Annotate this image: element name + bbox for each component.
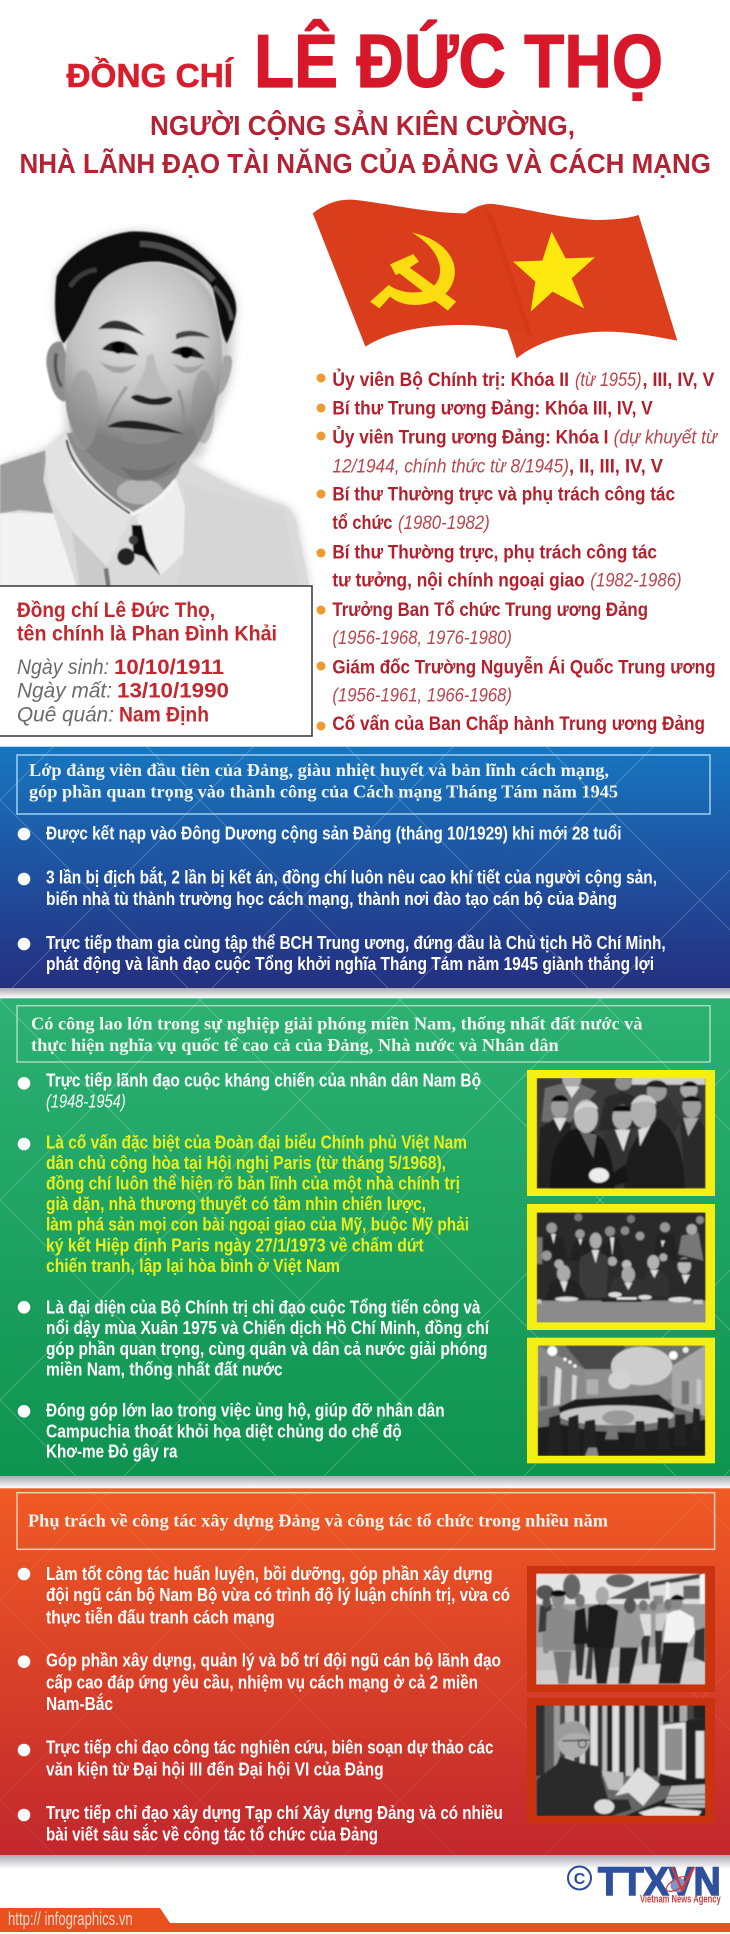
green item 3: miền Nam, thống nhất đất nước xyxy=(46,1360,283,1380)
logo: TTXVN: TTXVN xyxy=(598,1860,721,1904)
green item 2 highlighted: già dặn, nhà thương thuyết có tầm nhìn chiến lược, xyxy=(46,1194,426,1214)
photo: handshake xyxy=(527,1070,715,1196)
orange panel heading xyxy=(17,1493,715,1549)
position 6 xyxy=(316,599,648,649)
hometown: Nam Định xyxy=(119,704,209,727)
green item 3: Là đại diện của Bộ Chính trị chỉ đạo cuộc Tổng tiến công và xyxy=(46,1297,481,1317)
orange panel heading: Phụ trách về công tác xây dựng Đảng và công tác tổ chức trong nhiều năm xyxy=(28,1511,608,1531)
green item 1: (1948-1954) xyxy=(46,1091,126,1111)
green item 1 xyxy=(18,1071,481,1111)
info box xyxy=(0,586,312,736)
position 2: Bí thư Trung ương Đảng: Khóa III, IV, V xyxy=(332,398,653,420)
birth date: Ngày sinh: xyxy=(17,656,109,679)
photo: walking group xyxy=(527,1566,715,1692)
position 5: Bí thư Thường trực, phụ trách công tác xyxy=(332,541,657,563)
position 7 xyxy=(316,654,716,706)
green item 2 highlighted: dân chủ cộng hòa tại Hội nghị Paris (từ tháng 5/1968), xyxy=(46,1153,446,1173)
orange item 4: bài viết sâu sắc về công tác tổ chức của Đảng xyxy=(46,1824,378,1845)
name: Đồng chí Lê Đức Thọ, xyxy=(17,599,215,622)
name xyxy=(17,599,277,646)
position 3: (dự khuyết từ xyxy=(614,426,718,448)
name: tên chính là Phan Đình Khải xyxy=(17,623,277,646)
position 7: (1956-1961, 1966-1968) xyxy=(332,684,512,706)
position 1 xyxy=(316,367,714,391)
green panel heading xyxy=(17,1006,710,1062)
green item 3: góp phần quan trọng, cùng quân và dân cả nước giải phóng xyxy=(46,1339,487,1359)
green panel heading: Có công lao lớn trong sự nghiệp giải phóng miền Nam, thống nhất đất nước và xyxy=(31,1013,642,1033)
logo: TTXVN: C xyxy=(574,1871,586,1888)
panel: blue xyxy=(0,747,730,998)
photo: man reading xyxy=(527,1698,715,1823)
portrait photo xyxy=(0,231,309,587)
blue item 2 xyxy=(18,866,657,909)
subtitle xyxy=(20,109,711,179)
green item 4: Khơ-me Đỏ gây ra xyxy=(46,1442,178,1462)
green item 3: nổi dậy mùa Xuân 1975 và Chiến dịch Hồ Chí Minh, đồng chí xyxy=(46,1318,490,1338)
footer bar with url xyxy=(0,1908,730,1932)
orange item 1: đội ngũ cán bộ Nam Bộ vừa có trình độ lý luận chính trị, vừa có xyxy=(46,1585,510,1605)
orange item 1: Làm tốt công tác huấn luyện, bồi dưỡng, góp phần xây dựng xyxy=(46,1564,492,1584)
photo: conference hall xyxy=(527,1338,715,1463)
blue panel heading: Lớp đảng viên đầu tiên của Đảng, giàu nhiệt huyết và bản lĩnh cách mạng, xyxy=(29,760,609,780)
green item 2 highlighted xyxy=(18,1132,469,1276)
orange item 2: Nam-Bắc xyxy=(46,1693,113,1714)
death date: Ngày mất: xyxy=(17,679,112,702)
death date xyxy=(17,679,229,702)
photo: signing table xyxy=(527,1204,715,1330)
position 3: , II, III, IV, V xyxy=(569,455,663,477)
positions list xyxy=(316,367,718,735)
subtitle: NGƯỜI CỘNG SẢN KIÊN CƯỜNG, xyxy=(150,109,575,141)
green panel heading: thực hiện nghĩa vụ quốc tế cao cả của Đảng, Nhà nước và Nhân dân xyxy=(31,1035,559,1055)
blue panel heading: góp phần quan trọng vào thành công của Cách mạng Tháng Tám năm 1945 xyxy=(29,782,618,802)
green item 4: Campuchia thoát khỏi họa diệt chủng do chế độ xyxy=(46,1421,402,1441)
death date: 13/10/1990 xyxy=(117,679,229,702)
footer bar with url: http:// infographics.vn xyxy=(8,1909,133,1929)
position 1: Ủy viên Bộ Chính trị: Khóa II xyxy=(332,367,569,391)
position 6: Trưởng Ban Tổ chức Trung ương Đảng xyxy=(332,599,648,621)
blue panel heading xyxy=(17,755,710,814)
orange item 3: văn kiện từ Đại hội III đến Đại hội VI của Đảng xyxy=(46,1760,384,1780)
panel: orange xyxy=(0,1488,730,1869)
position 1: (từ 1955) xyxy=(575,369,642,391)
orange item 2 xyxy=(18,1651,501,1714)
green item 2 highlighted: làm phá sản mọi con bài ngoại giao của Mỹ, buộc Mỹ phải xyxy=(46,1215,469,1235)
green item 1: Trực tiếp lãnh đạo cuộc kháng chiến của nhân dân Nam Bộ xyxy=(46,1071,481,1091)
position 5 xyxy=(316,541,682,592)
position 1: , III, IV, V xyxy=(642,369,714,391)
birth date xyxy=(17,656,224,679)
orange item 3 xyxy=(18,1738,493,1780)
orange item 4 xyxy=(18,1803,503,1845)
blue item 3 xyxy=(18,933,666,974)
orange item 1 xyxy=(18,1564,510,1627)
orange item 2: cấp cao đáp ứng yêu cầu, nhiệm vụ cách mạng ở cả 2 miền xyxy=(46,1672,478,1692)
title xyxy=(66,19,663,103)
hometown xyxy=(17,704,209,727)
orange item 2: Góp phần xây dựng, quản lý và bố trí đội ngũ cán bộ lãnh đạo xyxy=(46,1651,501,1671)
green item 2 highlighted: Là cố vấn đặc biệt của Đoàn đại biểu Chính phủ Việt Nam xyxy=(46,1132,467,1152)
orange item 1: thực tiễn đấu tranh cách mạng xyxy=(46,1606,275,1627)
position 3: 12/1944, chính thức từ 8/1945) xyxy=(332,455,569,477)
green item 3 xyxy=(18,1297,490,1380)
green item 2 highlighted: chiến tranh, lập lại hòa bình ở Việt Nam xyxy=(46,1256,340,1276)
icon: party flag xyxy=(313,200,677,358)
position 6: (1956-1968, 1976-1980) xyxy=(332,627,512,649)
position 4: (1980-1982) xyxy=(398,512,490,534)
position 5: (1982-1986) xyxy=(590,570,682,592)
position 3: Ủy viên Trung ương Đảng: Khóa I xyxy=(332,424,608,448)
panel: green xyxy=(0,998,730,1488)
title: LÊ ĐỨC THỌ xyxy=(254,19,663,103)
position 5: tư tưởng, nội chính ngoại giao xyxy=(332,570,585,592)
blue item 2: biến nhà tù thành trường học cách mạng, thành nơi đào tạo cán bộ của Đảng xyxy=(46,889,617,909)
birth date: 10/10/1911 xyxy=(114,656,224,679)
hometown: Quê quán: xyxy=(17,704,114,727)
green item 4 xyxy=(18,1401,445,1462)
orange item 4: Trực tiếp chỉ đạo xây dựng Tạp chí Xây dựng Đảng và có nhiều xyxy=(46,1803,503,1823)
green item 4: Đóng góp lớn lao trong việc ủng hộ, giúp đỡ nhân dân xyxy=(46,1401,445,1421)
position 3 xyxy=(316,424,718,477)
green item 2 highlighted: ký kết Hiệp định Paris ngày 27/1/1973 về chấm dứt xyxy=(46,1236,424,1256)
position 4: Bí thư Thường trực và phụ trách công tác xyxy=(332,484,675,506)
green item 2 highlighted: đồng chí luôn thể hiện rõ bản lĩnh của một nhà chính trị xyxy=(46,1173,460,1193)
position 4: tổ chức xyxy=(332,512,393,534)
blue item 1: Được kết nạp vào Đông Dương cộng sản Đảng (tháng 10/1929) khi mới 28 tuổi xyxy=(46,823,622,843)
orange item 3: Trực tiếp chỉ đạo công tác nghiên cứu, biên soạn dự thảo các xyxy=(46,1738,494,1758)
title: ĐỒNG CHÍ xyxy=(66,57,234,94)
position 4 xyxy=(316,484,675,534)
